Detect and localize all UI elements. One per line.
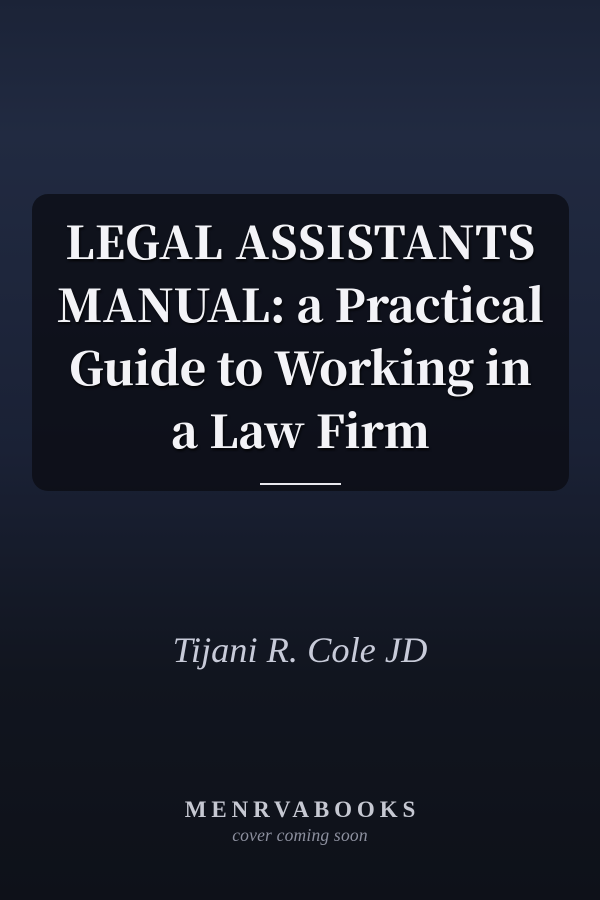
panel: title backdrop (32, 194, 569, 491)
author name: Tijani R. Cole JD (173, 630, 427, 670)
title: MANUAL: a Practical (57, 270, 544, 335)
title: a Law Firm (171, 396, 430, 461)
publisher name: MENRVABOOKS (185, 797, 420, 822)
title underline rule (260, 483, 341, 485)
cover note: cover coming soon (232, 825, 368, 845)
title: LEGAL ASSISTANTS (65, 207, 536, 272)
title (57, 207, 544, 461)
title: Guide to Working in (69, 333, 532, 398)
